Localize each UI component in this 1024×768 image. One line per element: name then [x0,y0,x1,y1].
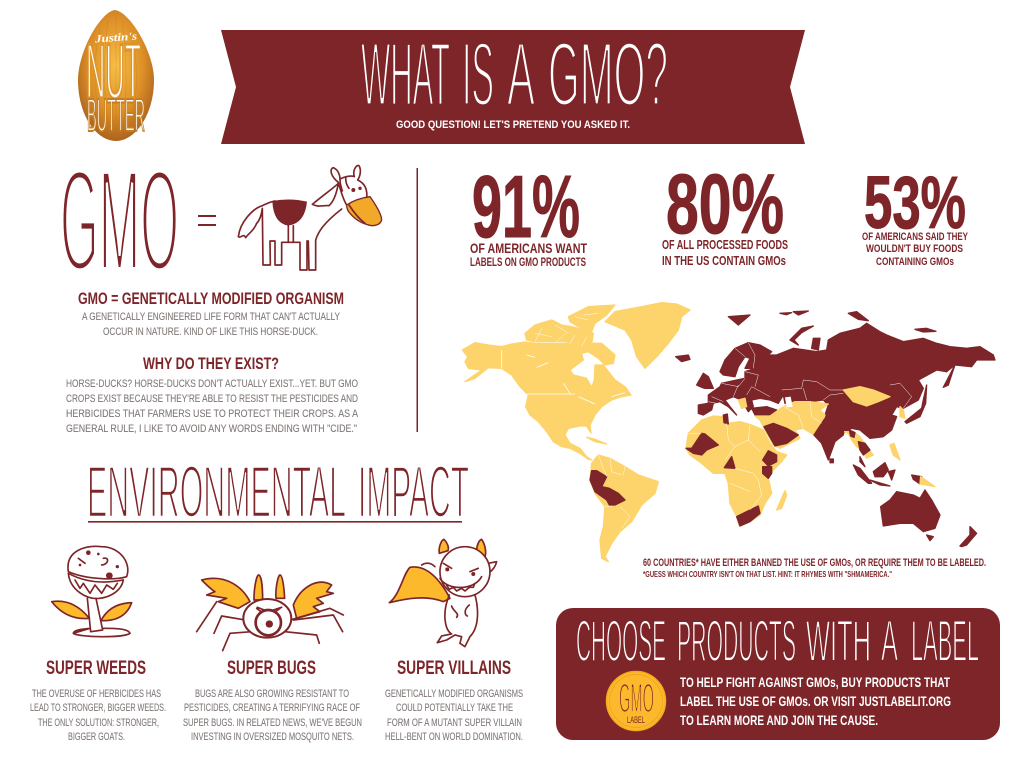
title: WHAT [361,25,450,125]
icon: GMO label badge [606,672,666,730]
map: north america and greenland [462,303,690,460]
super villains text: COULD POTENTIALLY TAKE THE [396,702,513,714]
super bugs text: INVESTING IN OVERSIZED MOSQUITO NETS. [191,731,354,743]
heading: environmental impact [87,452,469,533]
map: eurasia [697,311,995,463]
stat: 80%: OF ALL PROCESSED FOODS [662,237,788,252]
title: A [507,25,535,125]
heading: why do they exist: WHY DO THEY EXIST? [143,354,279,373]
super bugs text: PESTICIDES, CREATING A TERRIFYING RACE OF [184,702,360,714]
super villains text [385,657,523,743]
stat: 91%: LABELS ON GMO PRODUCTS [470,255,586,269]
panel body text [680,674,951,728]
definition text [82,311,340,338]
text: IMPACT [358,452,469,533]
title banner: GOOD QUESTION! LET'S PRETEND YOU ASKED IT. [396,119,630,131]
stat: 53%: WOULDN'T BUY FOODS [866,243,963,255]
panel: choose products with a label [556,608,1000,740]
heading: environmental impact: ENVIRONMENTAL [87,452,346,533]
stat: 80% [662,157,788,268]
panel: choose products with a label: GMO [619,675,654,721]
logo: almond nut butter [78,10,154,141]
stat: 91%: 91% [472,157,580,256]
why text: GENERAL RULE, I LIKE TO AVOID ANY WORDS ENDING WITH "CIDE." [66,423,357,435]
world map [462,303,995,562]
title: IS [462,25,494,125]
icon: super weed [52,546,132,637]
super weeds text: BIGGER GOATS. [68,731,125,743]
icon: super villain [389,539,497,647]
super weeds text: SUPER WEEDS [46,657,146,679]
stat: 91%: OF AMERICANS WANT [470,240,587,256]
super bugs text: SUPER BUGS. IN RELATED NEWS, WE'VE BEGUN [183,717,362,729]
why text: HORSE-DUCKS? HORSE-DUCKS DON'T ACTUALLY EXIST...YET. BUT GMO [66,378,358,390]
super bugs text [183,657,362,743]
text: NUT [86,27,141,115]
icon: super bug [197,575,343,651]
panel heading: PRODUCTS [677,609,796,674]
text: BUTTER [87,89,145,141]
super weeds text: THE ONLY SOLUTION: STRONGER, [38,717,159,729]
super villains text: FORM OF A MUTANT SUPER VILLAIN [387,717,522,729]
equals sign [198,215,216,226]
super weeds text [30,657,166,743]
title banner [221,25,805,144]
icon: GMO label badge: LABEL [627,715,645,725]
super weeds text: THE OVERUSE OF HERBICIDES HAS [32,688,161,700]
definition text: OCCUR IN NATURE. KIND OF LIKE THIS HORSE-DUCK. [103,326,318,338]
stat: 53% [862,161,968,268]
map caption [643,557,986,579]
super villains text: HELL-BENT ON WORLD DOMINATION. [385,731,523,743]
panel heading: A [881,609,898,674]
map caption: *GUESS WHICH COUNTRY ISN'T ON THAT LIST. HINT: IT RHYMES WITH "SHMAMERICA." [643,569,892,579]
definition text: A GENETICALLY ENGINEERED LIFE FORM THAT CAN'T ACTUALLY [82,311,340,323]
why text [66,378,359,435]
super bugs text: SUPER BUGS [227,657,316,679]
stat: 53%: 53% [864,161,966,244]
panel body text: TO LEARN MORE AND JOIN THE CAUSE. [680,712,878,728]
stat: 53%: CONTAINING GMOs [876,256,954,268]
heading: GMO definition: GMO = GENETICALLY MODIFIED ORGANISM [78,289,344,308]
stat: 91% [470,157,587,269]
super weeds text: LEAD TO STRONGER, BIGGER WEEDS. [30,702,166,714]
logo: almond nut butter: Justin's [93,31,137,46]
super villains text: GENETICALLY MODIFIED ORGANISMS [385,688,523,700]
title banner: GMO? [548,25,668,125]
why text: HERBICIDES THAT FARMERS USE TO PROTECT THEIR CROPS. AS A [66,408,359,420]
stat: 80%: 80% [666,157,784,251]
super villains text: SUPER VILLAINS [397,657,511,679]
panel heading: CHOOSE [576,609,666,674]
text: GMO [60,140,179,301]
icon: horse-duck [238,165,382,270]
panel heading: WITH [806,609,871,674]
map: south america [590,455,658,562]
map: africa, south asia, oceania [686,414,977,547]
why text: CROPS EXIST BECAUSE THEY'RE ABLE TO RESIST THE PESTICIDES AND [66,393,358,405]
super bugs text: BUGS ARE ALSO GROWING RESISTANT TO [195,688,349,700]
stat: 53%: OF AMERICANS SAID THEY [862,231,968,243]
stat: 80%: IN THE US CONTAIN GMOs [662,253,786,268]
